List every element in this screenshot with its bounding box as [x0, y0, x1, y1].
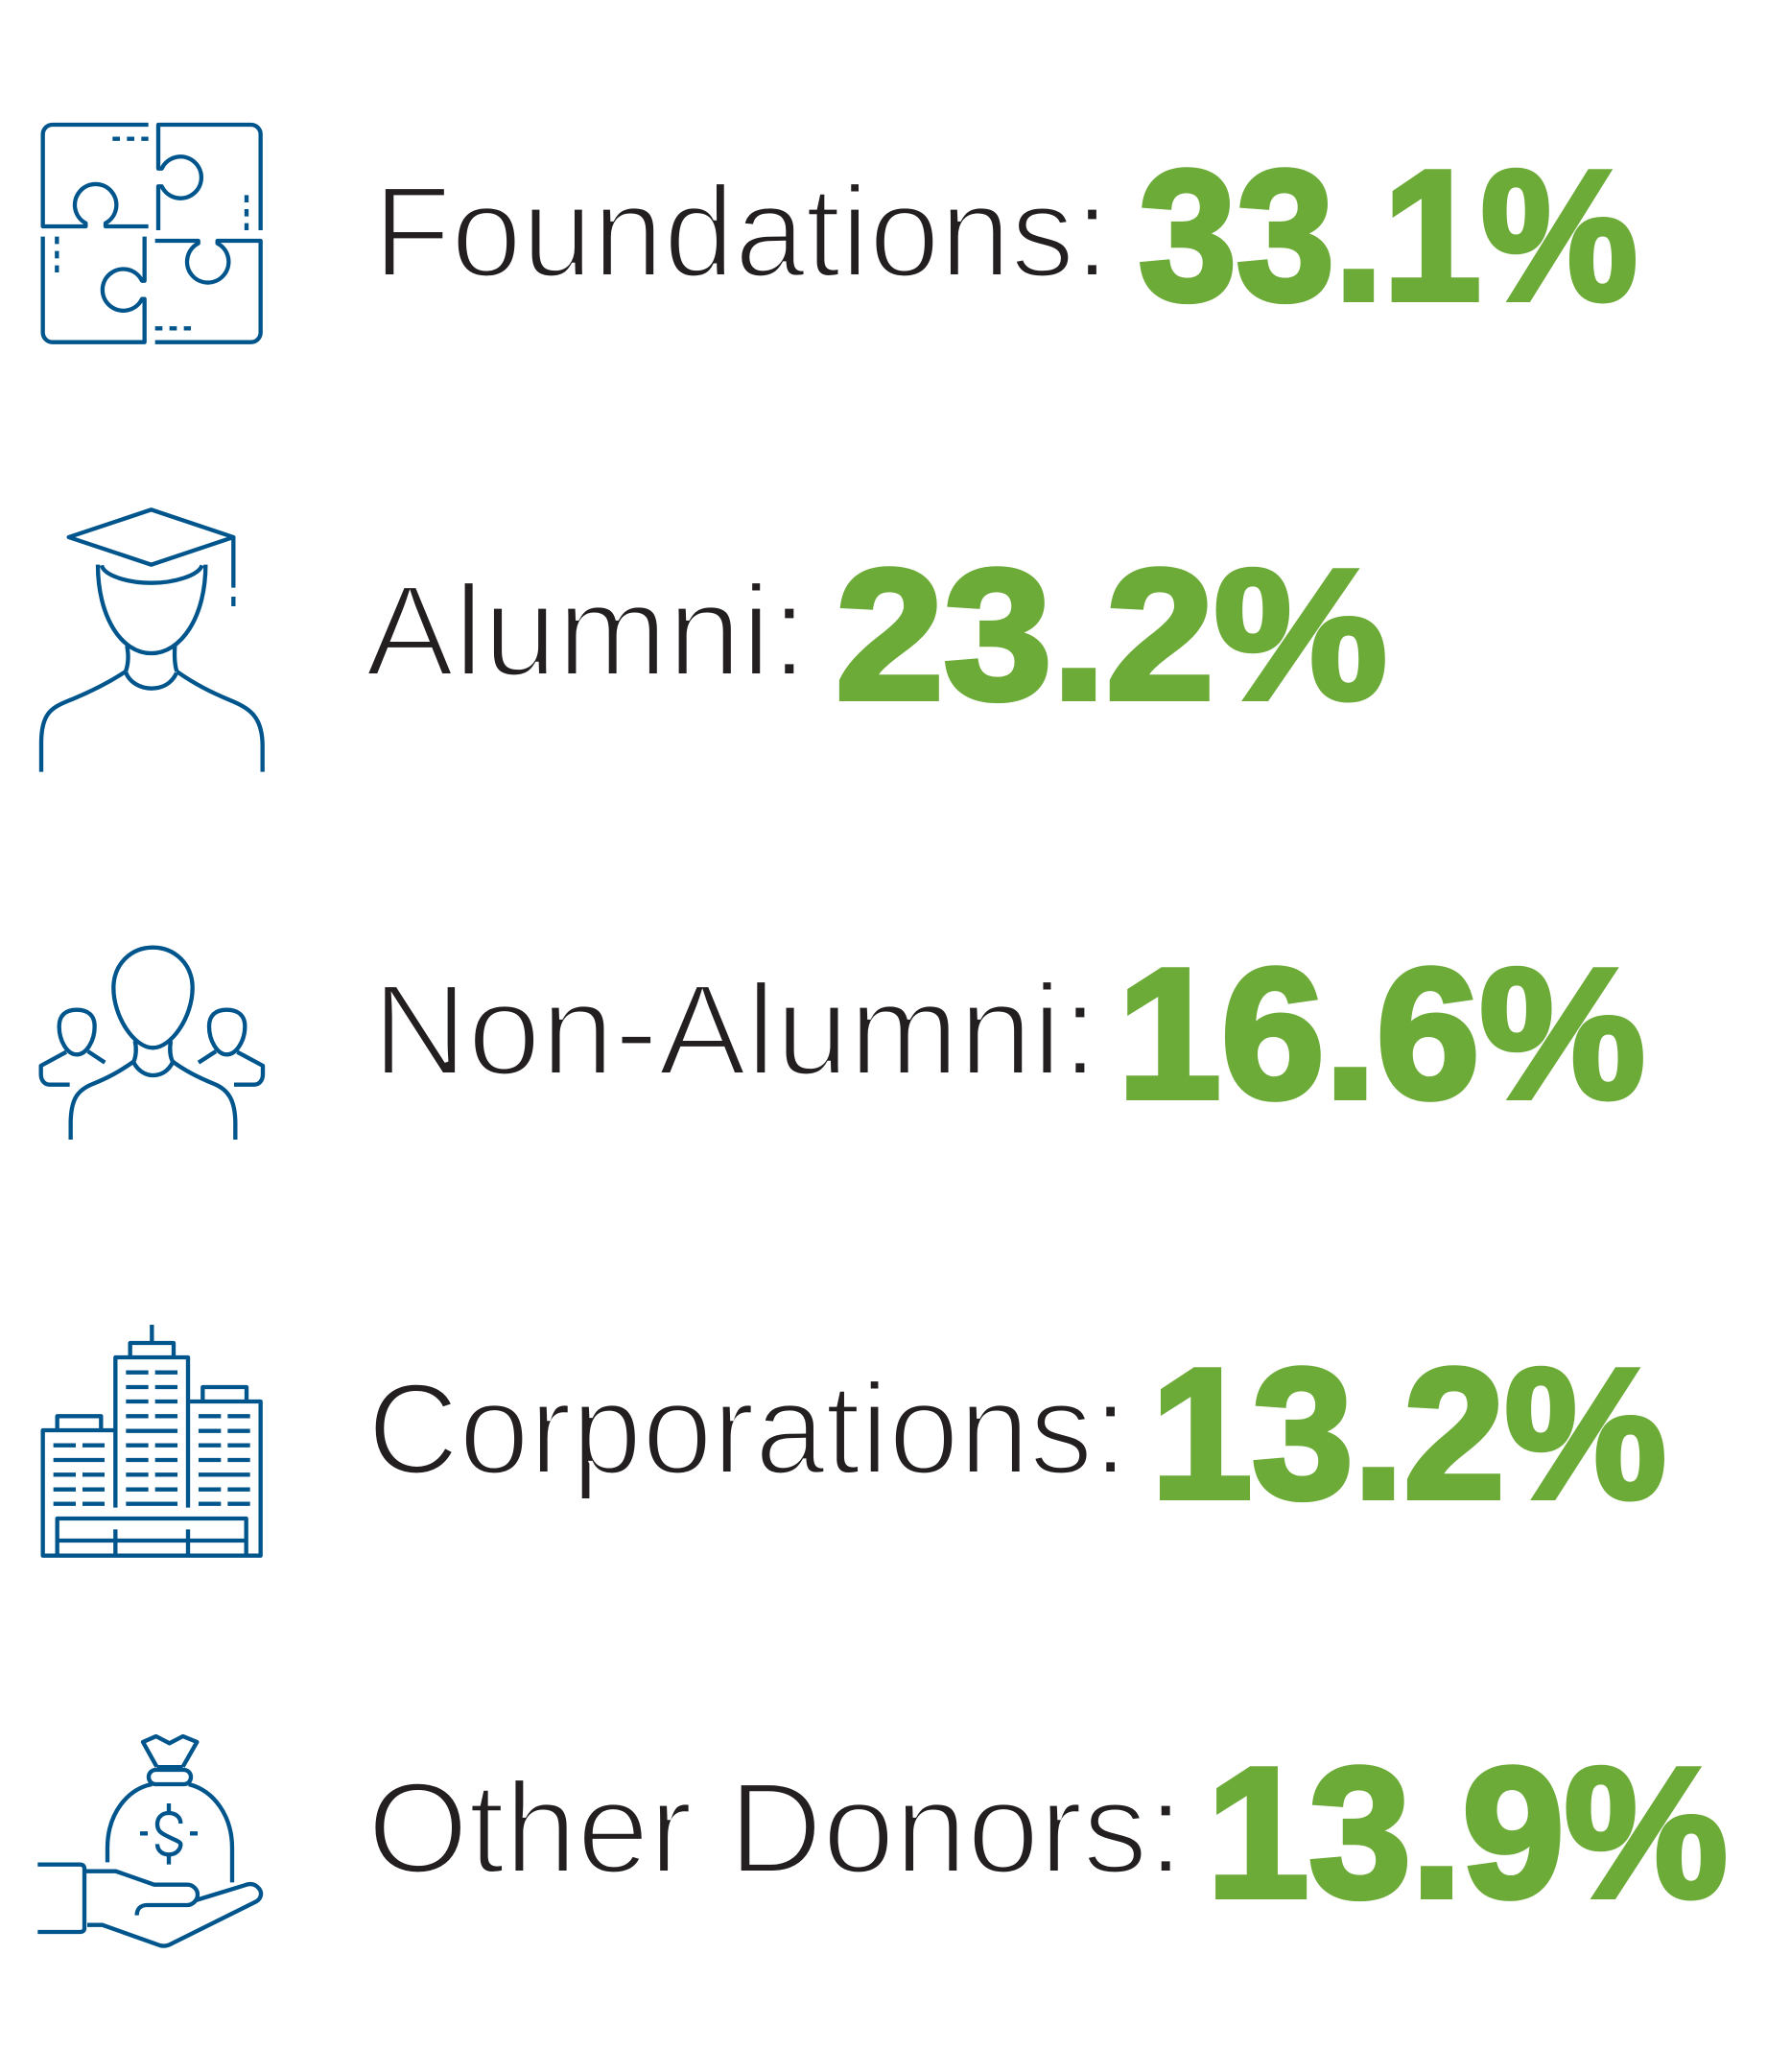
value: 13.9%: 13.9%: [1207, 1729, 1728, 1936]
value: 23.2%: 23.2%: [836, 530, 1387, 738]
icon: graduate with cap: [41, 509, 263, 772]
row: alumni: [41, 509, 1387, 772]
row: other donors: [37, 1729, 1728, 1946]
icon: hand holding money bag: [37, 1736, 261, 1946]
label: Foundations: Foundations:: [373, 159, 1110, 304]
label: Non-Alumni: Non-Alumni:: [372, 957, 1098, 1102]
icon: group of people: [41, 948, 263, 1140]
value: 33.1%: 33.1%: [1139, 131, 1637, 339]
label: Alumni: Alumni:: [365, 558, 808, 703]
row: non-alumni: [41, 930, 1645, 1140]
row: foundations: [43, 125, 1637, 342]
label: Corporations: Corporations:: [367, 1356, 1128, 1501]
icon: puzzle pieces: [43, 125, 261, 342]
row: corporations: [43, 1325, 1666, 1556]
icon: office buildings: [43, 1325, 261, 1556]
value: 13.2%: 13.2%: [1151, 1330, 1666, 1537]
label: Other Donors: Other Donors:: [367, 1755, 1184, 1900]
value: 16.6%: 16.6%: [1118, 930, 1645, 1137]
